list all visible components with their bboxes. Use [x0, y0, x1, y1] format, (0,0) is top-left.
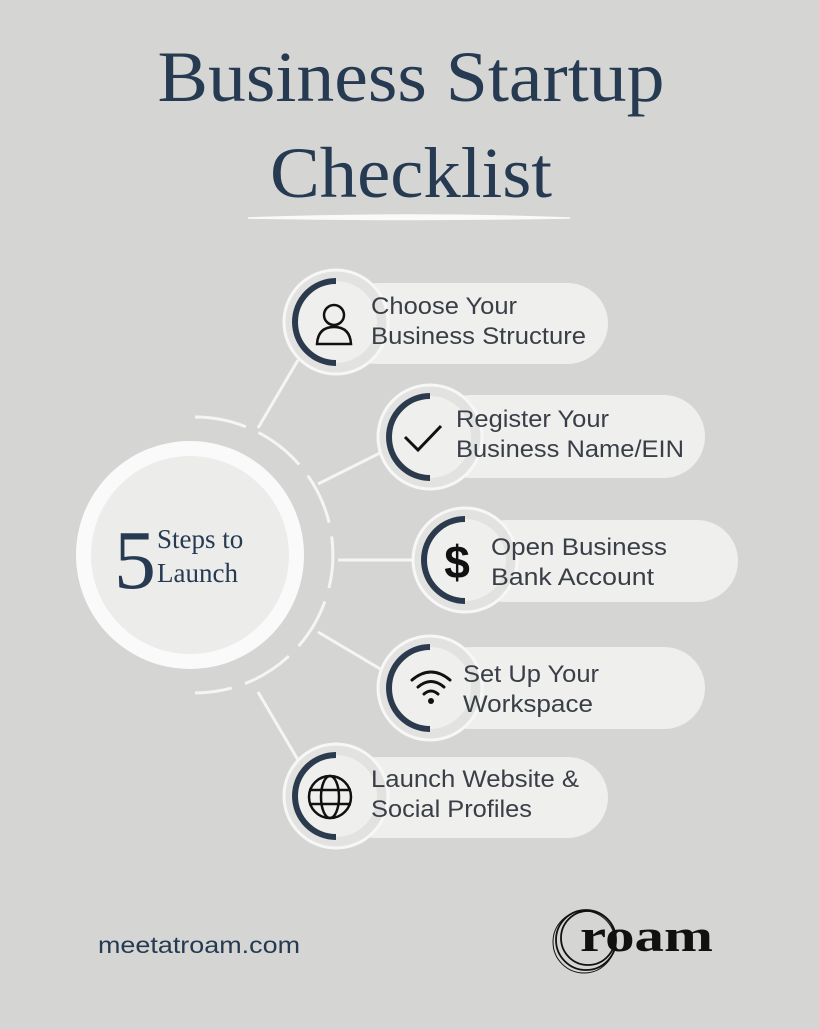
- step 2: Register Your: [456, 406, 609, 433]
- footer url: meetatroam.com: [98, 932, 300, 958]
- icon: check: [405, 426, 441, 450]
- step 3: Open Business: [491, 534, 667, 561]
- title: Checklist: [270, 133, 552, 213]
- step 1: Business Structure: [371, 323, 586, 350]
- logo: [553, 910, 713, 973]
- step 3: [413, 508, 738, 612]
- connectors: [258, 360, 415, 760]
- step 4: Set Up Your: [463, 661, 599, 688]
- title: Business Startup: [158, 37, 664, 117]
- dashed arc: [195, 417, 333, 693]
- underline: [248, 215, 570, 220]
- step 3: Bank Account: [491, 564, 654, 591]
- icon: person: [317, 305, 351, 344]
- icon: wifi: [412, 672, 450, 694]
- center circle: Launch: [157, 558, 238, 588]
- step 5: Launch Website &: [371, 766, 579, 793]
- title: [158, 37, 664, 213]
- icon: dollar: $: [444, 536, 470, 588]
- center circle: Steps to: [157, 524, 243, 554]
- icon: globe: [309, 776, 351, 818]
- step 2: [378, 385, 705, 489]
- step 4: Workspace: [463, 691, 593, 718]
- logo: roam: [580, 910, 713, 961]
- step 5: [284, 744, 608, 848]
- step 1: Choose Your: [371, 293, 517, 320]
- step 4: [378, 636, 705, 740]
- step 2: Business Name/EIN: [456, 436, 684, 463]
- step 5: Social Profiles: [371, 796, 532, 823]
- center circle: [76, 441, 304, 669]
- step 1: [284, 270, 608, 374]
- center circle: 5: [114, 514, 156, 607]
